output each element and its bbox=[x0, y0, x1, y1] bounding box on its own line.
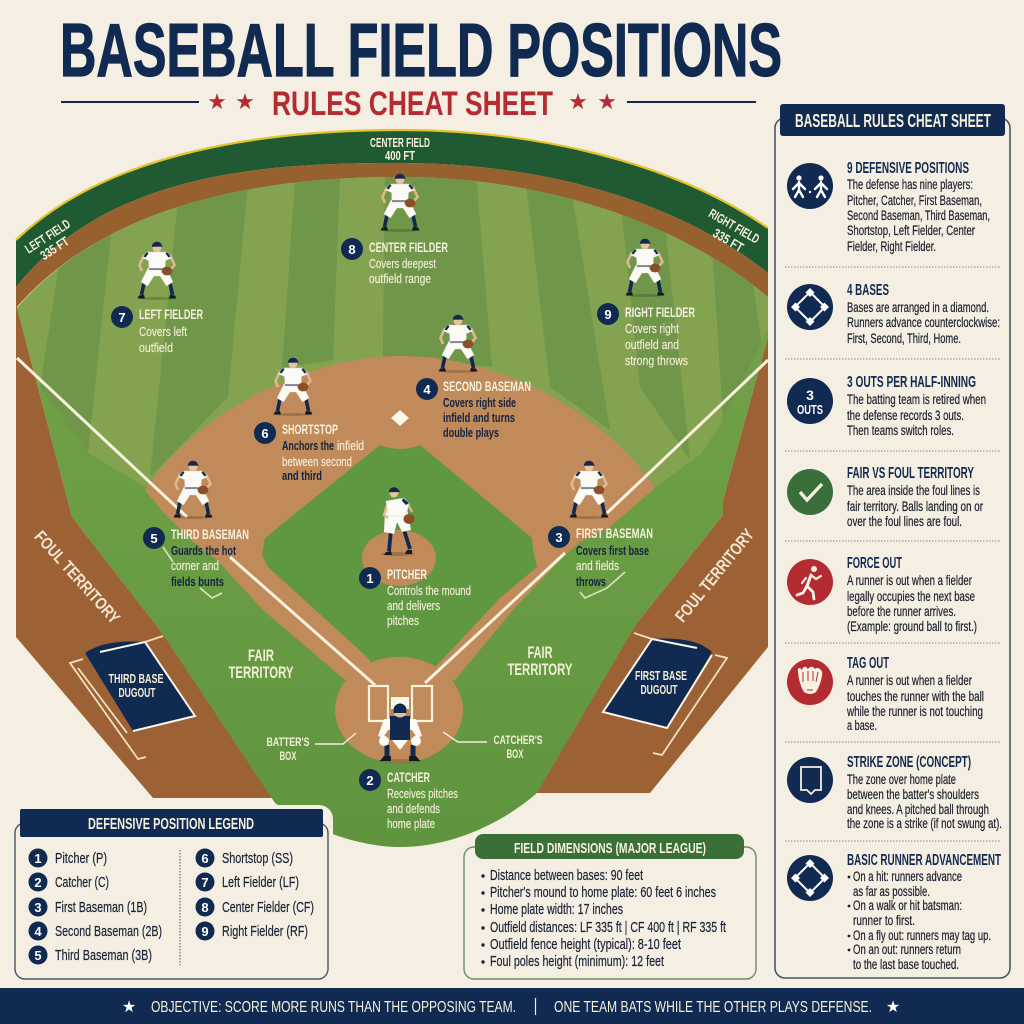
rule: force out bbox=[787, 555, 977, 634]
foul territory right label: FOUL TERRITORY bbox=[671, 525, 758, 626]
player 6 shortstop: SHORTSTOP bbox=[282, 421, 338, 437]
rule: 3 outs: OUTS bbox=[797, 402, 823, 417]
rule: tag out: a base. bbox=[847, 718, 877, 733]
rule: basic runner advancement: On an out: runners return bbox=[853, 942, 961, 957]
rule: fair vs foul bbox=[787, 465, 983, 529]
first base dugout: DUGOUT bbox=[640, 682, 678, 697]
rule: strike zone bbox=[787, 754, 1002, 831]
rule: 3 outs: the defense records 3 outs. bbox=[847, 408, 964, 423]
first base dugout: FIRST BASE bbox=[635, 668, 687, 683]
dimensions list: Pitcher's mound to home plate: 60 feet 6 inches bbox=[490, 884, 716, 901]
player 6 shortstop: infield bbox=[337, 438, 364, 453]
player 9 right fielder: strong throws bbox=[625, 353, 688, 368]
player 9 right fielder: Covers right bbox=[625, 321, 679, 336]
player 3 first baseman: 3 bbox=[555, 530, 563, 545]
coaching box ticks bbox=[163, 547, 625, 598]
player 3 first baseman: FIRST BASEMAN bbox=[576, 525, 653, 541]
legend entries left column: First Baseman (1B) bbox=[55, 899, 147, 916]
infield grass bbox=[262, 445, 537, 705]
first base dugout bbox=[603, 633, 727, 755]
player 9 right fielder: RIGHT FIELDER bbox=[625, 304, 695, 320]
third base dugout: THIRD BASE bbox=[108, 671, 164, 686]
rule: force out: A runner is out when a fielder bbox=[847, 573, 972, 588]
dimensions list: Outfield distances: LF 335 ft | CF 400 ft | RF 335 ft bbox=[490, 919, 727, 936]
right field marker: 335 FT bbox=[710, 225, 746, 255]
player 7 left fielder: LEFT FIELDER bbox=[139, 306, 203, 322]
fair territory left label: TERRITORY bbox=[228, 663, 294, 682]
player 7 left fielder: outfield bbox=[139, 340, 173, 355]
player 6 shortstop: between second bbox=[282, 454, 352, 469]
player 1 pitcher: 1 bbox=[366, 571, 374, 586]
rule: basic runner advancement: On a walk or hit batsman: bbox=[853, 898, 962, 913]
outfield wall band bbox=[16, 130, 768, 287]
dimensions list: Distance between bases: 90 feet bbox=[490, 867, 644, 884]
batter's box callout bbox=[266, 733, 356, 763]
player 3 first baseman: throws bbox=[576, 574, 606, 589]
dimensions list: Home plate width: 17 inches bbox=[490, 901, 623, 918]
dimensions header: FIELD DIMENSIONS (MAJOR LEAGUE) bbox=[514, 840, 706, 857]
fair territory right label bbox=[508, 643, 573, 679]
player 4 second baseman: 4 bbox=[423, 382, 431, 397]
legend header: DEFENSIVE POSITION LEGEND bbox=[88, 816, 254, 833]
player 5 third baseman: 5 bbox=[150, 531, 158, 546]
baseball field diagram bbox=[0, 130, 800, 860]
legend entries right column: Center Fielder (CF) bbox=[222, 899, 314, 916]
rule: fair vs foul: over the foul lines are foul. bbox=[847, 514, 962, 529]
player 1 pitcher: pitches bbox=[387, 613, 419, 628]
rule: 4 bases: 4 BASES bbox=[847, 282, 889, 299]
player 3 first baseman bbox=[548, 461, 653, 589]
subtitle with rules and stars bbox=[61, 85, 756, 123]
legend entries left column: Second Baseman (2B) bbox=[55, 923, 162, 940]
batter's box callout: BOX bbox=[280, 749, 296, 763]
player 7 left fielder bbox=[111, 242, 203, 355]
player 6 shortstop bbox=[254, 358, 364, 483]
player 4 second baseman: infield and turns bbox=[443, 410, 515, 425]
subtitle with rules and stars: ★ bbox=[568, 89, 588, 114]
player 6 shortstop: and third bbox=[282, 468, 322, 483]
subtitle with rules and stars: ★ bbox=[597, 89, 617, 114]
player 2 catcher: CATCHER bbox=[387, 769, 430, 785]
player 8 center fielder: 8 bbox=[348, 242, 356, 257]
player 8 center fielder: outfield range bbox=[369, 271, 431, 286]
player 2 catcher: and defends bbox=[387, 801, 440, 816]
center field marker: CENTER FIELD bbox=[370, 135, 430, 150]
rule: tag out: A runner is out when a fielder bbox=[847, 673, 972, 688]
player 7 left fielder: 7 bbox=[118, 310, 126, 325]
rule: 4 bases: First, Second, Third, Home. bbox=[847, 331, 961, 346]
player 2 catcher bbox=[359, 704, 458, 831]
legend entries left column: Third Baseman (3B) bbox=[55, 947, 152, 964]
rule: basic runner advancement: runner to first. bbox=[853, 913, 915, 928]
rule: basic runner advancement: On a hit: runners advance bbox=[853, 869, 962, 884]
grass with mowing stripes bbox=[17, 177, 768, 847]
player 1 pitcher: Controls the mound bbox=[387, 583, 471, 598]
center field marker: 400 FT bbox=[385, 148, 415, 163]
player 3 first baseman: and fields bbox=[576, 558, 619, 573]
player 8 center fielder: CENTER FIELDER bbox=[369, 239, 448, 255]
legend entries right column: Shortstop (SS) bbox=[222, 850, 293, 867]
player 5 third baseman: Guards the hot bbox=[171, 543, 236, 558]
player 3 first baseman: Covers first base bbox=[576, 543, 649, 558]
left field marker: 335 FT bbox=[37, 233, 72, 263]
player 5 third baseman: fields bunts bbox=[171, 574, 224, 589]
rule: force out: before the runner arrives. bbox=[847, 604, 956, 619]
center field marker bbox=[370, 135, 430, 163]
rule: force out: FORCE OUT bbox=[847, 555, 902, 572]
rule: 9 defensive positions bbox=[787, 160, 990, 254]
player 7 left fielder: Covers left bbox=[139, 324, 187, 339]
field dimensions panel bbox=[464, 834, 756, 979]
legend entries right column: Right Fielder (RF) bbox=[222, 923, 308, 940]
player 1 pitcher: and delivers bbox=[387, 598, 440, 613]
legend entries right column: 9 bbox=[201, 924, 209, 939]
rule: tag out: TAG OUT bbox=[847, 655, 889, 672]
legend entries left column: 1 bbox=[34, 851, 42, 866]
player 4 second baseman: double plays bbox=[443, 425, 499, 440]
rule: strike zone: The zone over home plate bbox=[847, 772, 956, 787]
right field marker bbox=[706, 206, 762, 255]
left field marker: LEFT FIELD bbox=[22, 216, 73, 256]
catcher's box callout bbox=[443, 732, 542, 761]
player 6 shortstop: Anchors the bbox=[282, 438, 334, 453]
dimensions list bbox=[481, 867, 727, 970]
rule: 9 defensive positions: Shortstop, Left Fielder, Center bbox=[847, 223, 975, 238]
legend entries right column: 6 bbox=[201, 851, 209, 866]
subtitle with rules and stars: RULES CHEAT SHEET bbox=[272, 85, 553, 123]
player 8 center fielder: Covers deepest bbox=[369, 256, 436, 271]
right field marker: RIGHT FIELD bbox=[706, 206, 762, 247]
rule: force out: legally occupies the next base bbox=[847, 589, 975, 604]
panel header bbox=[780, 104, 1005, 136]
player 9 right fielder: outfield and bbox=[625, 337, 679, 352]
legend entries left column: 2 bbox=[34, 875, 42, 890]
home plate circle bbox=[335, 657, 463, 763]
rule: 9 defensive positions: The defense has nine players: bbox=[847, 177, 973, 192]
rule: 4 bases bbox=[787, 282, 1000, 346]
bottom objective banner bbox=[0, 988, 1024, 1024]
dimensions list: Foul poles height (minimum): 12 feet bbox=[490, 953, 665, 970]
player 2 catcher: Receives pitches bbox=[387, 786, 458, 801]
catcher's box callout: CATCHER'S bbox=[494, 733, 542, 747]
legend entries left column: 4 bbox=[34, 924, 42, 939]
third base dugout bbox=[70, 636, 195, 759]
player 6 shortstop: 6 bbox=[261, 426, 269, 441]
legend entries right column: 7 bbox=[201, 875, 209, 890]
rule: 3 outs: Then teams switch roles. bbox=[847, 423, 954, 438]
bottom objective banner: ★ bbox=[122, 999, 136, 1016]
rule: tag out bbox=[787, 655, 984, 733]
rule: basic runner advancement: as far as possible. bbox=[853, 884, 930, 899]
batter's box callout: BATTER'S bbox=[266, 735, 310, 749]
defensive position legend panel bbox=[10, 805, 333, 985]
fair territory left label: FAIR bbox=[248, 646, 274, 665]
left field marker bbox=[22, 216, 73, 263]
batter's boxes and home plate bbox=[369, 686, 432, 721]
subtitle with rules and stars: ★ bbox=[207, 89, 227, 114]
foul territory ground bbox=[16, 290, 768, 798]
legend entries right column bbox=[196, 848, 314, 940]
dimensions list: Outfield fence height (typical): 8-10 feet bbox=[490, 936, 682, 953]
foul territory left label: FOUL TERRITORY bbox=[31, 527, 124, 628]
warning track bbox=[16, 163, 768, 308]
third base dugout: DUGOUT bbox=[118, 685, 156, 700]
pitcher's mound bbox=[362, 530, 436, 586]
second base bbox=[391, 410, 409, 426]
bottom objective banner: ONE TEAM BATS WHILE THE OTHER PLAYS DEFENSE. bbox=[554, 999, 872, 1016]
legend entries left column: Catcher (C) bbox=[55, 874, 109, 891]
player 1 pitcher: PITCHER bbox=[387, 566, 427, 582]
rule: 3 outs bbox=[787, 374, 986, 438]
legend entries right column: 8 bbox=[201, 900, 209, 915]
player 9 right fielder bbox=[597, 239, 695, 368]
player 2 catcher: 2 bbox=[366, 773, 374, 788]
player 4 second baseman: SECOND BASEMAN bbox=[443, 378, 531, 394]
player 5 third baseman: corner and bbox=[171, 558, 219, 573]
rules cheat sheet panel bbox=[775, 104, 1010, 978]
legend entries left column: 5 bbox=[34, 948, 42, 963]
player 2 catcher: home plate bbox=[387, 816, 435, 831]
fair territory left label bbox=[228, 646, 294, 682]
bottom objective banner: ★ bbox=[886, 999, 900, 1016]
legend entries right column: Left Fielder (LF) bbox=[222, 874, 299, 891]
legend entries left column: Pitcher (P) bbox=[55, 850, 107, 867]
subtitle with rules and stars: ★ bbox=[235, 89, 255, 114]
player 4 second baseman: Covers right side bbox=[443, 395, 516, 410]
player 1 pitcher bbox=[359, 487, 471, 628]
bottom objective banner: OBJECTIVE: SCORE MORE RUNS THAN THE OPPOSING TEAM. bbox=[151, 999, 516, 1016]
fair territory right label: TERRITORY bbox=[508, 660, 573, 679]
legend entries left column: 3 bbox=[34, 900, 42, 915]
rule: basic runner advancement bbox=[787, 852, 1001, 972]
infield dirt bbox=[145, 356, 655, 680]
yellow wall cap bbox=[16, 130, 768, 240]
legend entries left column bbox=[28, 848, 162, 964]
rule: 9 defensive positions: Fielder, Right Fielder. bbox=[847, 239, 936, 254]
rule: force out: (Example: ground ball to first.) bbox=[847, 619, 977, 634]
rule: 3 outs: 3 bbox=[806, 387, 814, 403]
player 9 right fielder: 9 bbox=[604, 307, 612, 322]
rule: basic runner advancement: to the last base touched. bbox=[853, 957, 959, 972]
dimensions header bbox=[475, 834, 744, 859]
player 4 second baseman bbox=[416, 315, 531, 440]
player 5 third baseman bbox=[143, 461, 249, 589]
fair territory right label: FAIR bbox=[528, 643, 552, 662]
foul lines bbox=[17, 358, 768, 685]
player 5 third baseman: THIRD BASEMAN bbox=[171, 526, 249, 542]
catcher's box callout: BOX bbox=[506, 747, 524, 761]
player 8 center fielder bbox=[341, 174, 448, 286]
legend header bbox=[20, 809, 323, 837]
